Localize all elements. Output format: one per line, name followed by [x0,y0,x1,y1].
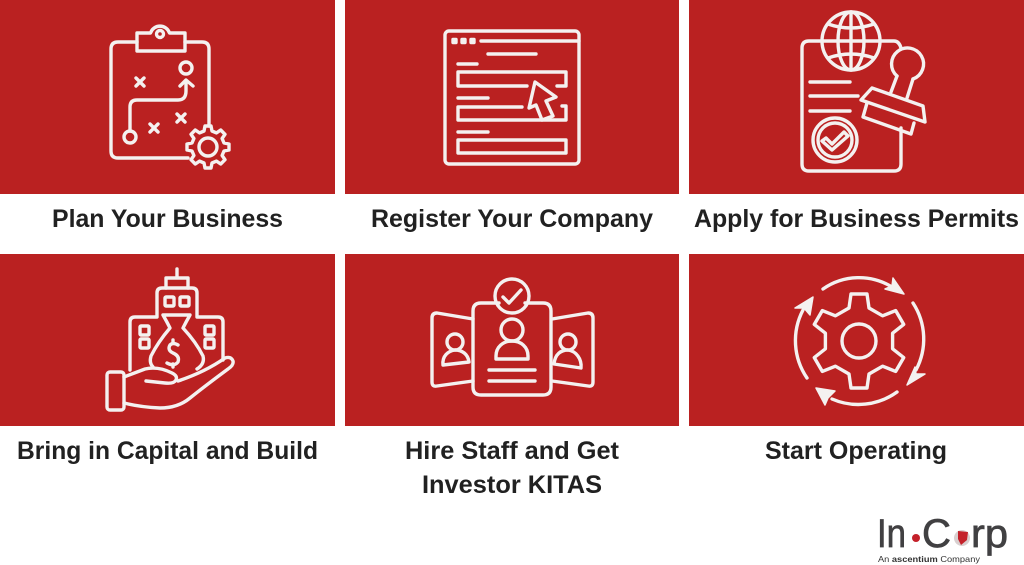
icon: staff profile cards with check [432,279,593,395]
panel background [345,254,679,426]
logo red dot [912,534,920,542]
wordmark part: In: In [877,512,906,556]
icon: hand holding money bag and buildings [107,269,233,410]
panel: plan your business [0,0,335,233]
panel background [345,0,679,194]
panel background [689,254,1024,426]
label: Start Operating [765,437,947,465]
label: Bring in Capital and Build [17,437,318,465]
label: Plan Your Business [52,205,283,233]
panel: bring in capital and build [0,254,335,465]
logo globe [954,530,970,546]
panel: hire staff and get investor kitas [345,254,679,499]
label: Register Your Company [371,205,653,233]
label line 1: Hire Staff and Get [405,437,620,465]
icon: permit document with globe and stamp [802,12,925,171]
panel: apply for business permits [689,0,1024,233]
panel background [689,0,1024,194]
panel background [0,0,335,194]
logo: InCorp [877,512,1008,564]
label line 2: Investor KITAS [422,471,602,499]
label: Apply for Business Permits [694,205,1019,233]
panel background [0,254,335,426]
icon: clipboard strategy plan with gear [111,26,229,168]
icon: gear with circular arrows [795,278,925,405]
panel: register your company [345,0,679,233]
wordmark part: rp: rp [971,512,1008,556]
panel: start operating [689,254,1024,465]
logo tagline: An ascentium Company [878,554,981,564]
wordmark part: C: C [922,512,951,556]
icon: online form with cursor [445,31,579,164]
